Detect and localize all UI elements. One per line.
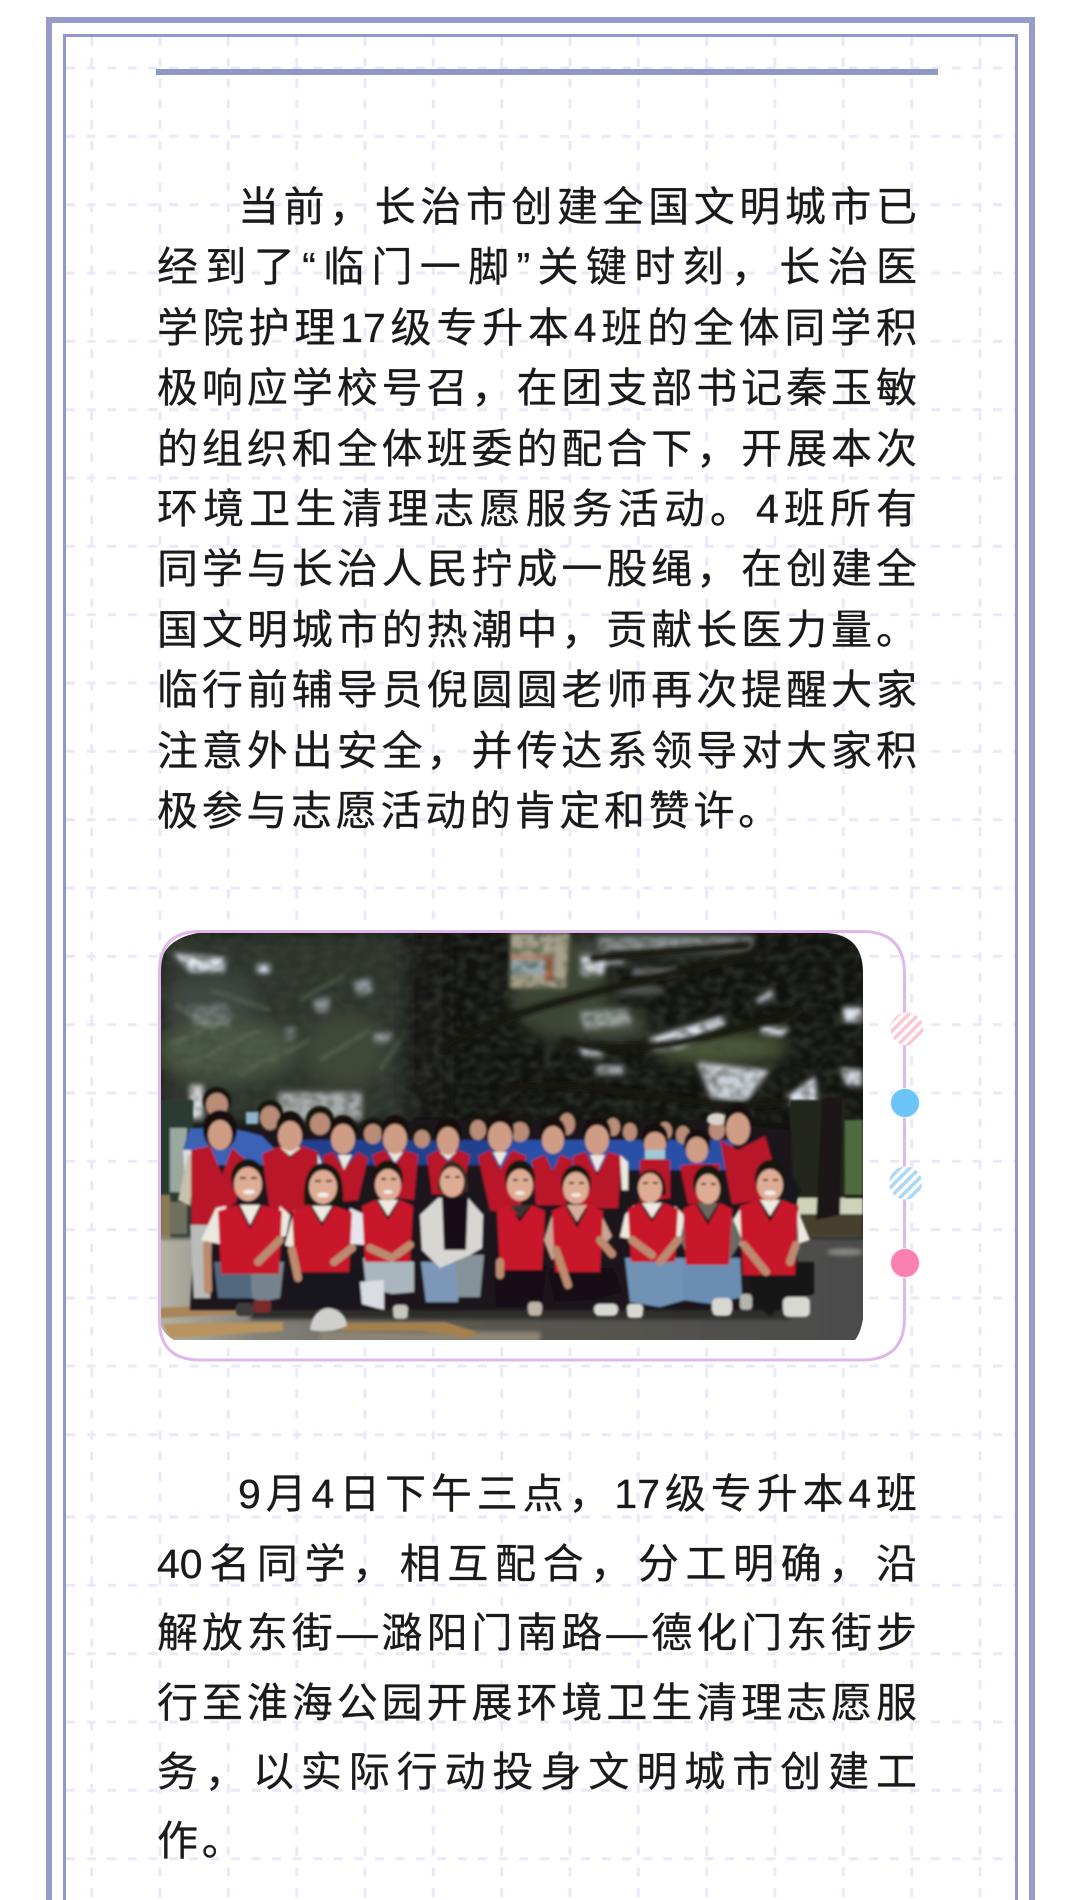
front row: shoes [236, 1294, 810, 1319]
paragraph: activity details: 行至淮海公园开展环境卫生清理志愿服 [157, 1680, 917, 1726]
paragraph: introduction: 当前，长治市创建全国文明城市已 [238, 184, 917, 230]
photo frame with group photo [158, 930, 924, 1362]
front row: jacket person [420, 1198, 483, 1268]
paragraph: introduction: 同学与长治人民拧成一股绳，在创建全 [157, 546, 917, 592]
icon: blue dot [890, 1088, 920, 1118]
top rule [156, 69, 938, 75]
paragraph: introduction: 注意外出安全，并传达系领导对大家积 [157, 728, 917, 774]
photo: distant building [510, 933, 570, 988]
paragraph: introduction: 极响应学校号召，在团支部书记秦玉敏 [157, 365, 917, 411]
group photo [150, 933, 870, 1348]
paragraph: activity details: 解放东街—潞阳门南路—德化门东街步 [157, 1610, 917, 1656]
frame outline [160, 932, 904, 1360]
photo: ground [150, 1238, 870, 1348]
front row: sleeves and arms [201, 1205, 810, 1250]
icon: pink dot [890, 1248, 920, 1278]
dark branches [440, 945, 800, 1105]
photo: left wall [160, 1100, 193, 1240]
paragraph: introduction: 极参与志愿活动的肯定和赞许。 [157, 788, 783, 834]
paragraph: activity details [157, 1471, 917, 1864]
photo: trees and sky [155, 933, 863, 1340]
paragraph: activity details: 务，以实际行动投身文明城市创建工 [157, 1749, 917, 1795]
photo: people [178, 1087, 814, 1331]
photo: right trunk, foliage and fence [790, 1100, 863, 1238]
paragraph: introduction: 临行前辅导员倪圆圆老师再次提醒大家 [157, 667, 917, 713]
icon: blue striped dot [889, 1166, 922, 1200]
paragraph: introduction: 环境卫生清理志愿服务活动。4班所有 [157, 486, 917, 532]
paragraph: activity details: 作。 [157, 1818, 246, 1864]
paragraph: introduction: 的组织和全体班委的配合下，开展本次 [157, 426, 917, 472]
paragraph: activity details: 40名同学，相互配合，分工明确，沿 [157, 1541, 917, 1587]
photo: brooms [160, 1304, 477, 1338]
third row jackets [183, 1128, 290, 1165]
icon: pink striped dot [890, 1012, 924, 1046]
front row: legs [190, 1225, 212, 1298]
second row heads [202, 1103, 752, 1152]
paragraph: activity details: 9月4日下午三点，17级专升本4班 [238, 1471, 917, 1517]
front row: vests [218, 1200, 798, 1275]
paragraph: introduction: 学院护理17级专升本4班的全体同学积 [157, 305, 917, 351]
paragraph: introduction: 国文明城市的热潮中，贡献长医力量。 [157, 607, 917, 653]
photo: foliage streaks [170, 975, 400, 1075]
paragraph: introduction: 经到了“临门一脚”关键时刻，长治医 [157, 244, 917, 290]
paragraph: introduction [157, 184, 917, 834]
front row: heads [231, 1159, 785, 1206]
third row heads [203, 1087, 694, 1146]
second row: standing volunteers [178, 1155, 195, 1206]
front row: hands [207, 1240, 796, 1290]
